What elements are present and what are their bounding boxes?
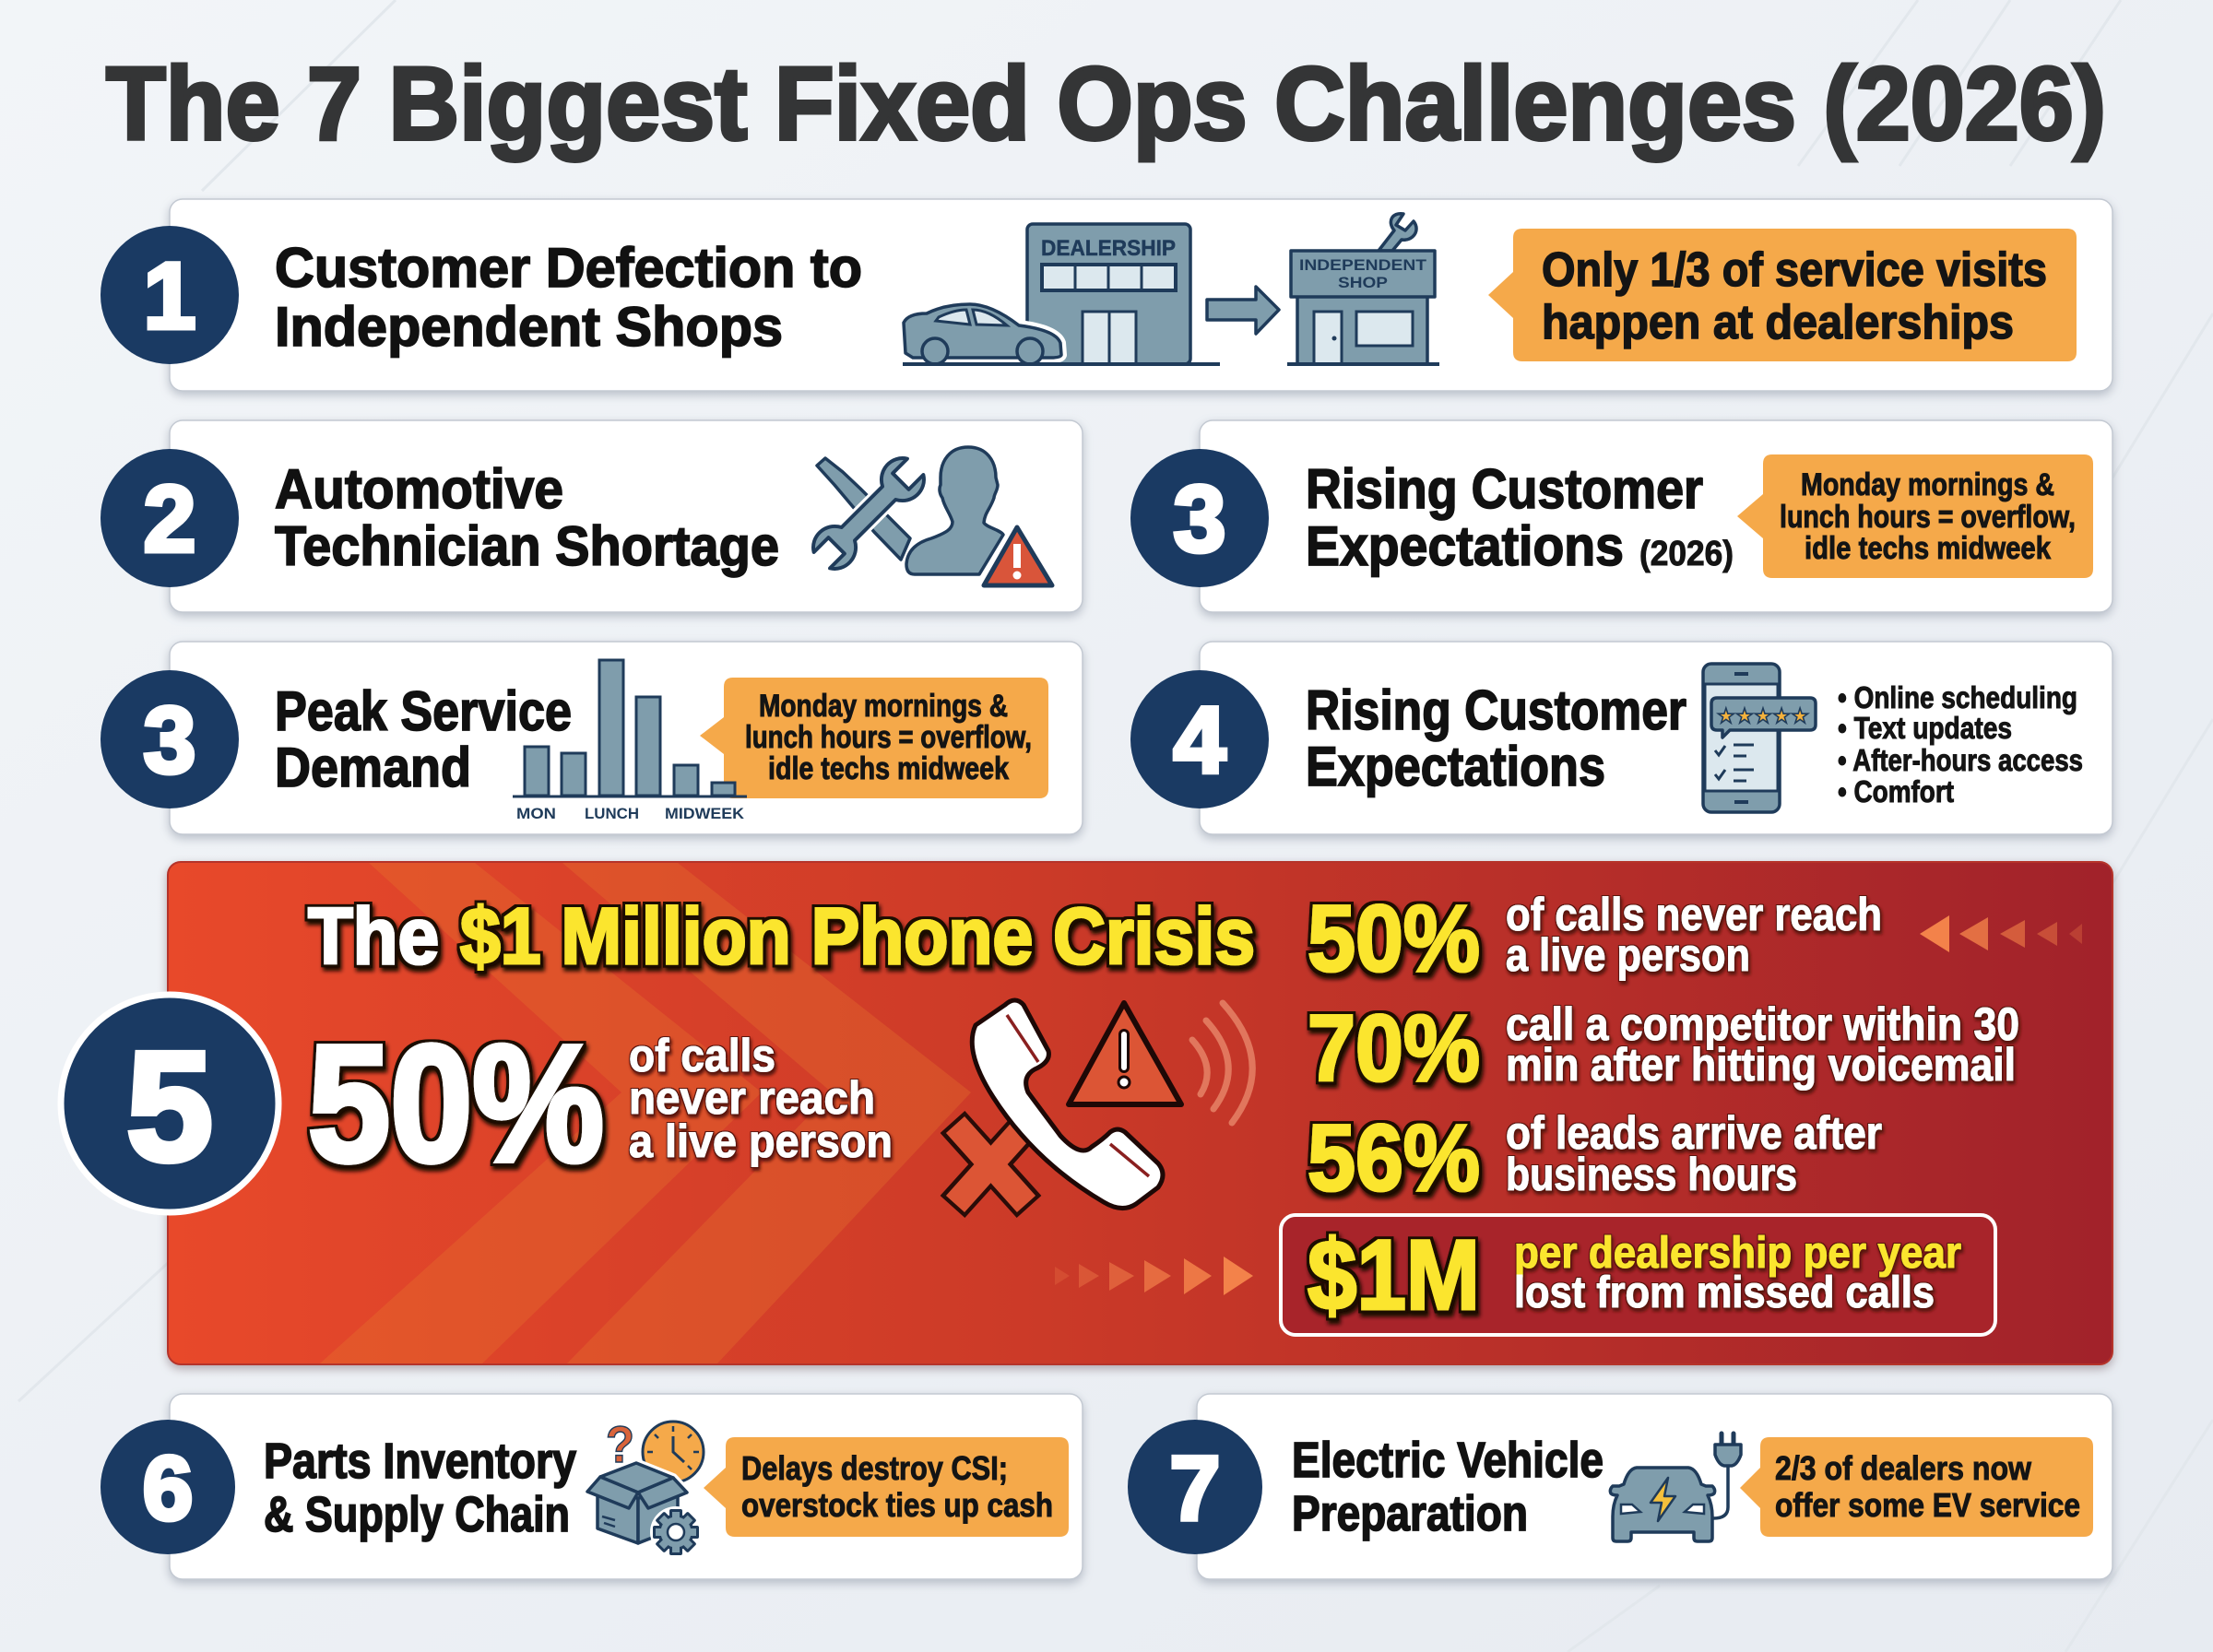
stat: of calls never reach text: a live person <box>629 1115 893 1167</box>
heading: rising expectations <box>1306 458 1734 577</box>
heading: rising customer expectations: Expectations <box>1306 736 1605 797</box>
heading: rising expectations: Rising Customer <box>1306 458 1703 520</box>
badge 1: 1 <box>144 243 195 348</box>
callout: 1/3 of visits: happen at dealerships <box>1542 296 2014 349</box>
icon: independent shop: SHOP <box>1338 274 1388 291</box>
heading: the $1 million phone crisis: $1 Million Phone Crisis <box>460 892 1255 981</box>
icon: tools <box>807 452 930 575</box>
heading: technician shortage: Technician Shortage <box>275 515 779 577</box>
heading: the $1 million phone crisis: The <box>308 892 439 981</box>
icon: crossed out x <box>953 1122 1029 1207</box>
badge 4 <box>1130 670 1269 808</box>
heading: customer defection <box>275 237 862 358</box>
badge 2: 2 <box>144 466 195 572</box>
heading: customer defection: Independent Shops <box>275 296 783 358</box>
heading: rising expectations: (2026) <box>1639 535 1734 573</box>
badge 1 <box>101 226 239 364</box>
callout: peak overflow: idle techs midweek <box>1805 531 2051 566</box>
badge 3 <box>1130 449 1269 587</box>
arrows: left pointing chevrons <box>1920 915 2082 952</box>
icon: sound waves <box>1192 1003 1252 1123</box>
heading: electric vehicle <box>1292 1433 1604 1541</box>
badge 4: 4 <box>1174 688 1226 793</box>
list: customer expectations: • Comfort <box>1838 774 1954 808</box>
badge 7: 7 <box>1170 1437 1220 1539</box>
heading: rising customer expectations: Rising Customer <box>1306 679 1686 741</box>
callout: 2/3 of dealers: offer some EV service <box>1775 1486 2080 1524</box>
stat: 50% never reach <box>1308 886 1882 991</box>
callout: 1/3 of visits: Only 1/3 of service visits <box>1542 243 2047 297</box>
heading: peak service demand: Peak Service <box>275 680 572 742</box>
badge 5: 5 <box>126 1020 213 1193</box>
arrow: dealership to independent shop <box>1207 287 1279 334</box>
callout: peak overflow second: idle techs midweek <box>768 751 1009 786</box>
callout: peak overflow: lunch hours = overflow, <box>1780 500 2076 535</box>
stat: 50% never reach: of calls never reach <box>1506 889 1882 940</box>
heading: technician shortage: Automotive <box>275 458 563 520</box>
bar chart: weekly service demand: LUNCH <box>585 805 639 822</box>
icon: independent shop: INDEPENDENT <box>1299 256 1427 274</box>
heading: technician shortage <box>275 458 779 577</box>
callout: $1M lost per year <box>1281 1215 1995 1335</box>
icon: phone handset <box>972 1000 1163 1209</box>
icon: phone with reviews: ★★★★★ <box>1717 704 1809 727</box>
icon: plug and cable <box>1713 1434 1741 1518</box>
stat: of calls never reach text: never reach <box>629 1072 875 1124</box>
badge 3: 3 <box>1174 466 1225 572</box>
callout: 2/3 of dealers: 2/3 of dealers now <box>1775 1449 2032 1487</box>
badge 3 peak <box>101 670 239 808</box>
heading: parts inventory: & Supply Chain <box>264 1487 570 1542</box>
list: customer expectations: • Text updates <box>1838 711 2012 745</box>
icon: gear <box>650 1506 702 1558</box>
stat: 56% after hours: 56% <box>1308 1105 1480 1210</box>
icon: dealership building <box>1027 224 1190 364</box>
heading: electric vehicle: Electric Vehicle <box>1292 1433 1604 1488</box>
callout: $1M lost per year: $1M <box>1308 1219 1480 1330</box>
callout: delays destroy csi <box>704 1437 1069 1537</box>
heading: parts inventory: Parts Inventory <box>264 1434 576 1489</box>
icon: electric car <box>1610 1468 1715 1541</box>
bar chart: weekly service demand: MIDWEEK <box>665 805 745 822</box>
panel: challenge 1 customer defection <box>101 199 2112 391</box>
heading: rising expectations: Expectations <box>1306 515 1624 577</box>
stat: of calls never reach text: of calls <box>629 1030 775 1081</box>
icon: independent shop <box>1287 214 1439 364</box>
callout: delays destroy csi: Delays destroy CSI; <box>741 1449 1008 1487</box>
heading: peak service demand: Demand <box>275 737 471 798</box>
stat: 50% never reach: a live person <box>1506 929 1750 981</box>
list: customer expectations: • Online scheduling <box>1838 680 2077 714</box>
panel: challenge 3 rising expectations 2026 <box>1130 420 2112 612</box>
panel: the $1 million phone crisis <box>61 862 2112 1364</box>
badge 6: 6 <box>143 1437 193 1539</box>
bar chart: weekly service demand: MON <box>516 805 556 822</box>
callout: $1M lost per year: lost from missed calls <box>1514 1268 1935 1317</box>
callout: peak overflow: Monday mornings & <box>1801 467 2054 502</box>
callout: peak overflow <box>1737 454 2093 578</box>
panel: challenge 2 technician shortage <box>101 420 1083 612</box>
heading: parts inventory <box>264 1434 576 1542</box>
icon: alert triangle <box>1069 1003 1181 1104</box>
icon: phone with reviews <box>1703 664 1816 812</box>
stat: 56% after hours <box>1308 1105 1882 1210</box>
icon: parts box <box>587 1463 687 1543</box>
badge 6 <box>101 1420 235 1554</box>
title: The 7 Biggest Fixed Ops Challenges (2026) <box>106 46 2106 161</box>
stat: 50% never reach: 50% <box>1308 886 1480 991</box>
icon: technician silhouette <box>906 447 1003 574</box>
stat: 70% call a competitor: min after hitting voicemail <box>1506 1039 2016 1091</box>
heading: customer defection: Customer Defection to <box>275 237 862 299</box>
stat: 70% call a competitor: 70% <box>1308 996 1480 1101</box>
panel: challenge 4 rising expectations <box>1130 642 2112 834</box>
icon: question mark: ? <box>606 1415 634 1473</box>
icon: car <box>903 304 1220 364</box>
badge 2 <box>101 449 239 587</box>
badge 3 peak: 3 <box>144 688 195 793</box>
bar chart: weekly service demand <box>513 660 747 822</box>
callout: peak overflow second: Monday mornings & <box>759 689 1008 724</box>
callout: peak overflow second: lunch hours = overflow, <box>745 720 1032 755</box>
list: customer expectations <box>1838 680 2083 808</box>
panel: peak service demand <box>101 642 1083 834</box>
list: customer expectations: • After-hours access <box>1838 743 2083 777</box>
badge 7 <box>1128 1420 1262 1554</box>
callout: 1/3 of visits <box>1488 229 2077 361</box>
badge 5 <box>61 995 278 1212</box>
icon: dealership building: DEALERSHIP <box>1041 236 1176 261</box>
stat: 70% call a competitor: call a competitor within 30 <box>1506 998 2019 1050</box>
icon: warning triangle <box>984 527 1052 585</box>
callout: 2/3 of dealers <box>1740 1437 2093 1537</box>
stat: 70% call a competitor <box>1308 996 2019 1101</box>
callout: delays destroy csi: overstock ties up cash <box>741 1486 1053 1524</box>
heading: peak service demand <box>275 680 572 798</box>
icon: clock <box>643 1422 704 1482</box>
arrows: right pointing chevrons <box>1055 1257 1253 1295</box>
callout: $1M lost per year: per dealership per year <box>1514 1229 1961 1278</box>
heading: electric vehicle: Preparation <box>1292 1486 1528 1541</box>
stat: 50% big number: 50% <box>308 1011 604 1197</box>
callout: peak overflow second <box>700 678 1048 798</box>
panel: challenge 7 electric vehicle <box>1128 1394 2112 1579</box>
panel: challenge 6 parts inventory <box>101 1394 1083 1579</box>
stat: 56% after hours: business hours <box>1506 1149 1797 1200</box>
stat: of calls never reach text <box>629 1030 893 1167</box>
stat: 56% after hours: of leads arrive after <box>1506 1107 1882 1159</box>
heading: rising customer expectations <box>1306 679 1686 797</box>
